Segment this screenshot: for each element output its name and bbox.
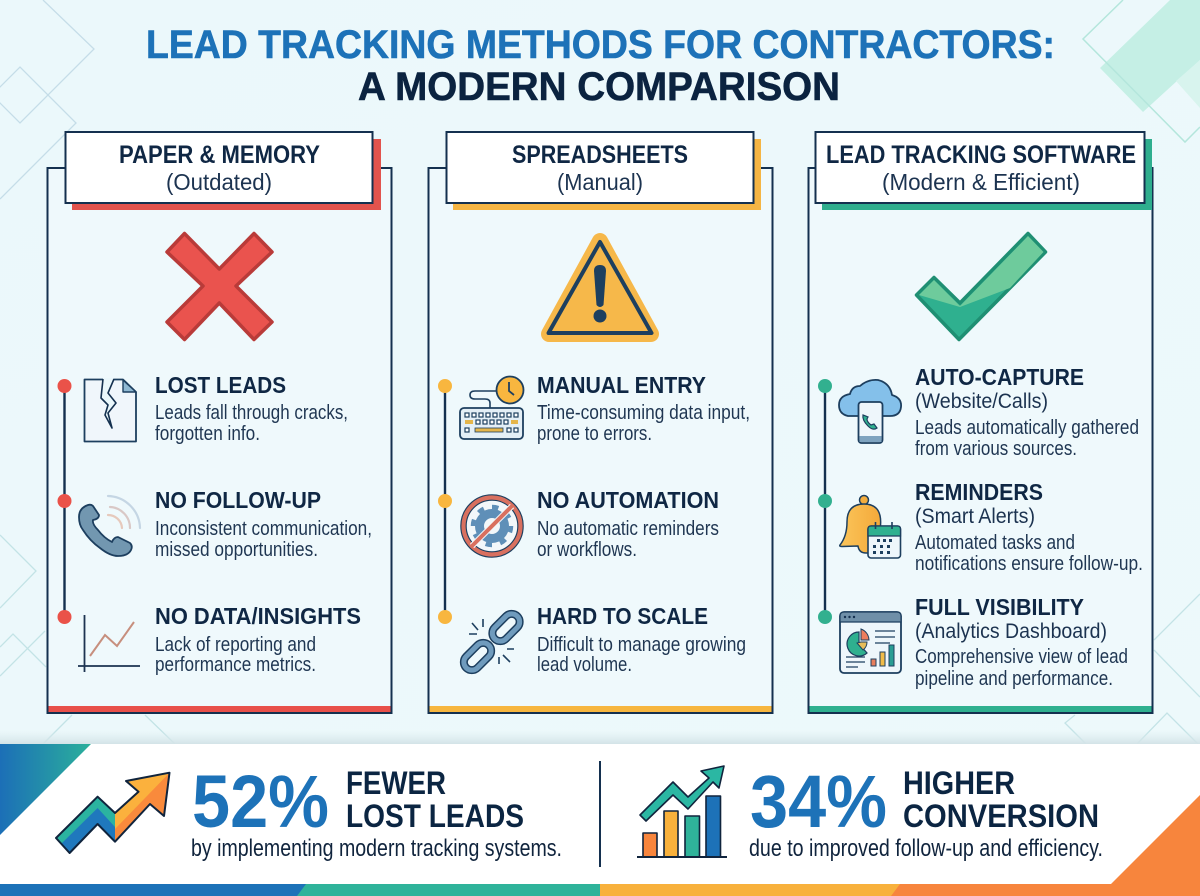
title: LEAD TRACKING METHODS FOR CONTRACTORS: [146,23,1055,67]
stat: 34 percent: due to improved follow-up and efficiency. [749,835,1103,862]
stat: 52 percent: LOST LEADS [346,798,524,834]
item: full visibility: pipeline and performance. [915,668,1113,690]
item: auto-capture [915,364,1139,460]
stat: 52 percent [191,760,562,862]
item: reminders: (Smart Alerts) [915,505,1035,528]
stat: 52 percent: by implementing modern tracking systems. [191,835,562,862]
icon: flat line chart [78,615,140,672]
item: auto-capture: Leads automatically gathered [915,417,1139,439]
item: auto-capture: from various sources. [915,438,1077,460]
item: reminders: notifications ensure follow-up. [915,553,1143,575]
item: no data [155,603,361,676]
item: hard to scale [537,603,746,676]
bottom colour strip [0,884,1200,896]
stat: 34 percent: 34% [750,760,887,843]
stat: 34 percent: HIGHER [903,765,1015,801]
bottom stats band [0,744,1200,896]
stat: 34 percent: CONVERSION [903,798,1099,834]
icon: warning triangle [548,241,652,334]
item: reminders: Automated tasks and [915,532,1075,554]
header: paper and memory: PAPER & MEMORY [119,141,320,169]
stat: 52 percent: FEWER [346,765,446,801]
header: lead tracking software: LEAD TRACKING SOFTWARE [826,141,1136,169]
icon: phone [79,496,140,556]
timeline [438,379,452,624]
item: lost leads: Leads fall through cracks, [155,402,348,424]
timeline [818,379,832,624]
item: reminders: REMINDERS [915,479,1043,505]
header: spreadsheets: (Manual) [557,169,643,195]
header: paper and memory [66,132,372,203]
panel: spreadsheets [428,132,772,713]
stat: 52 percent: 52% [192,760,329,843]
item: no automation: NO AUTOMATION [537,487,719,513]
corner accent: left [0,744,91,835]
icon: analytics dashboard [840,612,901,673]
corner accent: right [1111,795,1200,884]
icon: bell and calendar [840,496,900,558]
icon: gear with prohibition sign [463,497,521,555]
icon: broken chain [461,611,523,673]
item: lost leads [155,372,348,445]
item: full visibility: FULL VISIBILITY [915,594,1084,620]
title: A MODERN COMPARISON [358,65,840,109]
header: spreadsheets [446,132,754,203]
header: lead tracking software: (Modern & Efficient) [882,169,1080,195]
header: spreadsheets: SPREADSHEETS [512,141,688,169]
item: hard to scale: lead volume. [537,654,632,676]
icon: bar chart with arrow [637,766,727,857]
item: no follow-up: NO FOLLOW-UP [155,487,321,513]
item: full visibility [915,594,1128,690]
icon: keyboard and clock [460,376,524,439]
timeline [58,379,72,624]
item: no data: NO DATA/INSIGHTS [155,603,361,629]
item: auto-capture: (Website/Calls) [915,390,1048,413]
item: no data: Lack of reporting and [155,634,316,656]
item: manual entry [537,372,750,445]
item: no follow-up: Inconsistent communication, [155,518,372,540]
item: no automation: or workflows. [537,539,637,561]
item: reminders [915,479,1143,575]
panel: lead tracking software [808,132,1152,713]
item: manual entry: Time-consuming data input, [537,402,750,424]
icon: torn document [84,378,136,442]
item: auto-capture: AUTO-CAPTURE [915,364,1084,390]
item: hard to scale: Difficult to manage growing [537,634,746,656]
item: no automation [537,487,719,561]
item: full visibility: (Analytics Dashboard) [915,620,1107,643]
item: no follow-up [155,487,372,561]
item: full visibility: Comprehensive view of lead [915,646,1128,668]
title [146,23,1055,109]
item: no data: performance metrics. [155,654,316,676]
item: manual entry: MANUAL ENTRY [537,372,706,398]
item: hard to scale: HARD TO SCALE [537,603,708,629]
item: lost leads: LOST LEADS [155,372,286,398]
header: lead tracking software [816,132,1144,203]
icon: red cross [167,234,272,340]
icon: cloud and phone [839,380,901,443]
item: no automation: No automatic reminders [537,518,719,540]
item: manual entry: prone to errors. [537,423,652,445]
header: paper and memory: (Outdated) [166,169,272,195]
item: lost leads: forgotten info. [155,423,260,445]
icon: growth arrow [56,773,170,853]
icon: green check mark [916,234,1046,340]
panel: paper and memory [48,132,392,713]
stat: 34 percent [749,760,1103,862]
item: no follow-up: missed opportunities. [155,539,318,561]
